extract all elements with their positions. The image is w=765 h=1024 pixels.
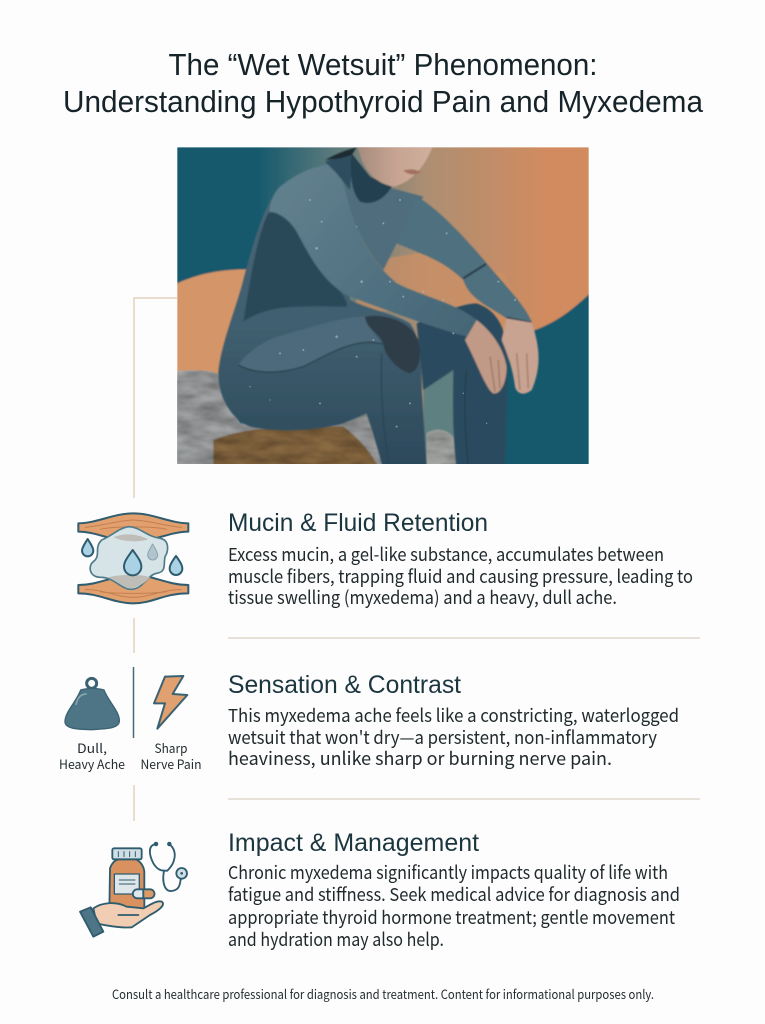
heading: Mucin & Fluid Retention: [228, 509, 488, 537]
divider between pain types: [132, 667, 134, 738]
body text: tissue swelling (myxedema) and a heavy, dull ache.: [228, 584, 617, 610]
label: sharp nerve pain: [140, 738, 202, 773]
section 2: sensation and contrast: [59, 667, 679, 773]
body text: [228, 541, 693, 610]
knee pad: [365, 316, 420, 373]
label: sharp nerve pain: Sharp: [154, 738, 188, 757]
rocks: [170, 370, 457, 470]
body text: Excess mucin, a gel-like substance, accumulates between: [228, 541, 664, 567]
body text: Chronic myxedema significantly impacts quality of life with: [228, 859, 668, 885]
icon: hand holding medicine with stethoscope: [80, 843, 187, 937]
title: [63, 47, 704, 119]
hands: [465, 320, 507, 393]
icon: heavy weight: [65, 678, 119, 730]
title: The “Wet Wetsuit” Phenomenon:: [168, 47, 598, 82]
far arm: [397, 197, 532, 322]
section 1: mucin and fluid retention: [78, 509, 693, 610]
near arm: [269, 165, 477, 337]
water droplets: [249, 199, 516, 428]
thigh panel: [238, 317, 383, 372]
section 3: impact and management: [80, 829, 680, 952]
label: dull heavy ache: [59, 738, 125, 773]
body text: wetsuit that won't dry—a persistent, non-inflammatory: [228, 724, 658, 750]
body text: This myxedema ache feels like a constricting, waterlogged: [228, 702, 679, 728]
body text: [228, 702, 679, 771]
title: Understanding Hypothyroid Pain and Myxedema: [63, 84, 704, 119]
collar: [351, 153, 392, 203]
heading: Sensation & Contrast: [228, 671, 461, 699]
connector line: photo to first icon: [134, 298, 177, 498]
body text: and hydration may also help.: [228, 926, 444, 952]
torso and thigh: [218, 167, 427, 470]
body text: [228, 859, 680, 952]
label: dull heavy ache: Dull,: [77, 738, 107, 757]
label: dull heavy ache: Heavy Ache: [59, 754, 125, 773]
heading: Impact & Management: [228, 829, 479, 857]
face and neck: [357, 147, 433, 188]
body text: appropriate thyroid hormone treatment; gentle movement: [228, 904, 675, 930]
icon: mucin between muscle fibers with water drops: [78, 513, 188, 603]
body text: heaviness, unlike sharp or burning nerve pain.: [228, 745, 612, 771]
back leg: [417, 303, 508, 470]
body text: fatigue and stiffness. Seek medical advice for diagnosis and: [228, 881, 680, 907]
icon: lightning bolt: [154, 676, 187, 729]
footer disclaimer: Consult a healthcare professional for diagnosis and treatment. Content for informational purposes only.: [112, 984, 654, 1003]
label: sharp nerve pain: Nerve Pain: [140, 754, 202, 773]
chest: [343, 180, 424, 270]
side panel: [243, 212, 347, 322]
body text: muscle fibers, trapping fluid and causing pressure, leading to: [228, 563, 693, 589]
neck yoke: [325, 153, 353, 190]
hero photo: person in wet wetsuit seated on a rock: [170, 140, 597, 470]
